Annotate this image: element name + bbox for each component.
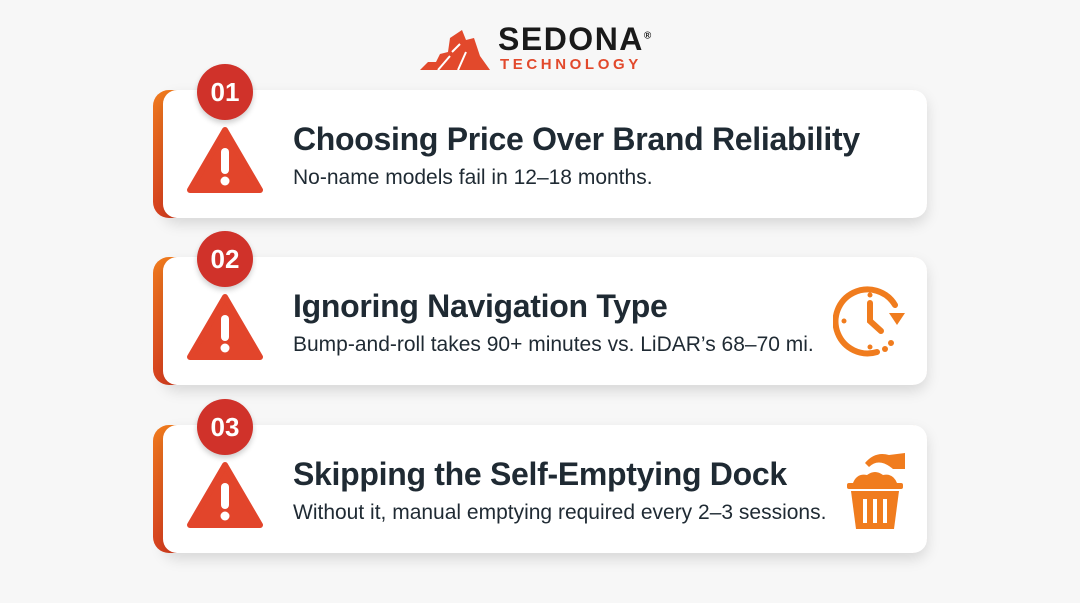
badge 02 [197,231,253,287]
icon: logo mountains [420,30,490,70]
icon: clock [833,286,905,356]
icon: warning [187,462,263,528]
icon: warning [187,127,263,193]
icon: warning [187,294,263,360]
text: No-name models fail in 12–18 months. [293,166,653,189]
icon: trash [847,453,905,529]
text: Without it, manual emptying required every 2–3 sessions. [293,501,826,524]
title: Skipping the Self-Emptying Dock [293,456,787,492]
logo: SEDONA® [498,21,653,57]
badge 01 [197,64,253,120]
panel: card 1 [153,90,927,218]
badge 01: 01 [211,77,239,107]
logo [420,21,653,73]
panel: card 2 [153,257,927,385]
title: Choosing Price Over Brand Reliability [293,121,860,157]
text: Bump-and-roll takes 90+ minutes vs. LiDAR’s 68–70 mi. [293,333,814,356]
panel: card 3 [153,425,927,553]
badge 03: 03 [211,412,239,442]
title: Ignoring Navigation Type [293,288,667,324]
badge 03 [197,399,253,455]
badge 02: 02 [211,244,239,274]
logo: TECHNOLOGY [500,56,642,73]
